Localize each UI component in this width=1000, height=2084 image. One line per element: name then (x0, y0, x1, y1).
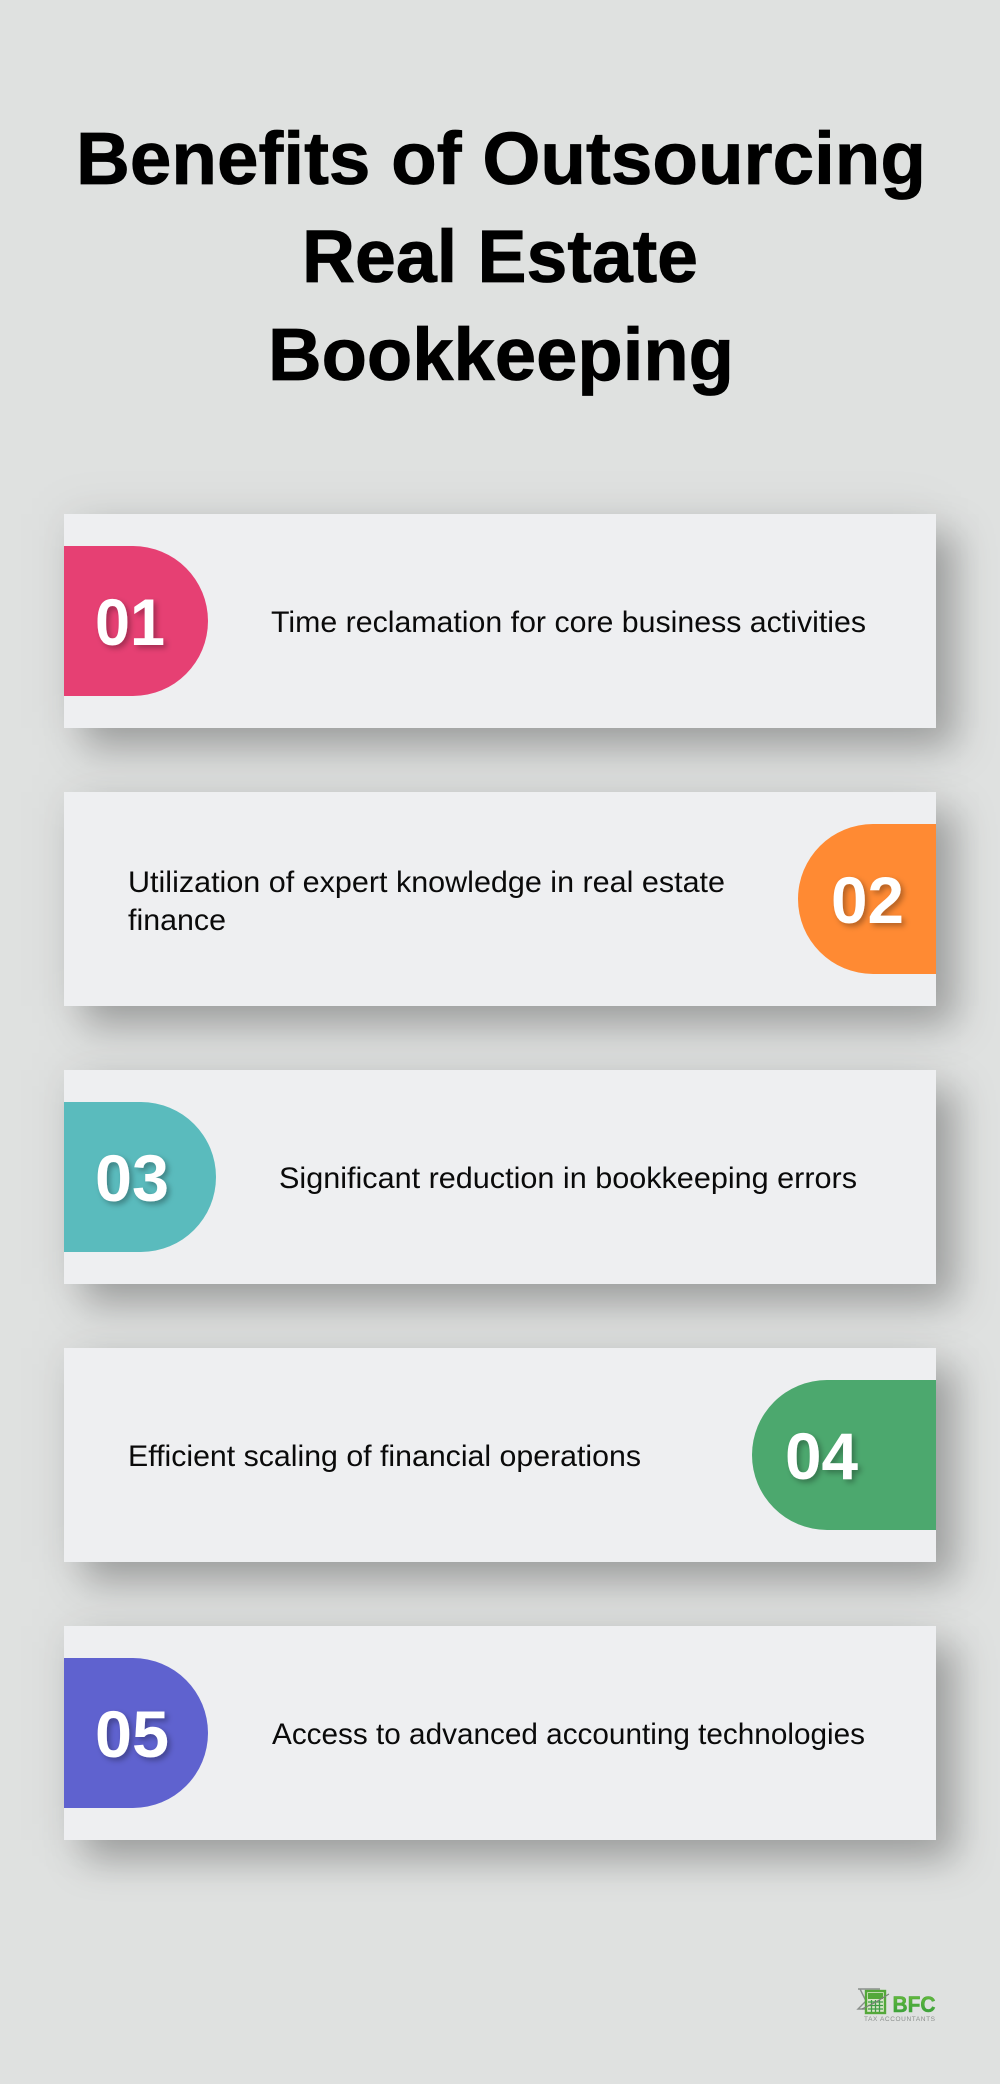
title: Benefits of Outsourcing (76, 117, 926, 200)
badge 03: 03 (95, 1141, 169, 1215)
text 01: Time reclamation for core business activities (271, 606, 866, 639)
title: Real Estate (302, 215, 698, 298)
panel: benefit 03 (64, 1070, 936, 1284)
text 03: Significant reduction in bookkeeping errors (279, 1162, 857, 1195)
badge 01 (64, 546, 208, 696)
text 02: Utilization of expert knowledge in real estate (128, 866, 725, 899)
badge 01: 01 (95, 585, 165, 659)
badge 03 (64, 1102, 216, 1252)
logo wordmark: BFC (892, 1992, 936, 2017)
text 05: Access to advanced accounting technologies (272, 1718, 865, 1751)
title (76, 117, 926, 396)
title: Bookkeeping (268, 313, 734, 396)
badge 04 (752, 1380, 936, 1530)
text 02: finance (128, 904, 226, 937)
icon: calculator (858, 1989, 889, 2013)
badge 02 (798, 824, 936, 974)
logo: BFC Tax Accountants (858, 1989, 936, 2023)
text 02 (128, 866, 725, 937)
panel: benefit 01 (64, 514, 936, 728)
panel: benefit 05 (64, 1626, 936, 1840)
panel: benefit 04 (64, 1348, 936, 1562)
text 04: Efficient scaling of financial operations (128, 1440, 641, 1473)
badge 05: 05 (95, 1697, 169, 1771)
badge 04: 04 (785, 1419, 858, 1493)
panel: benefit 02 (64, 792, 936, 1006)
badge 05 (64, 1658, 208, 1808)
logo tagline: TAX ACCOUNTANTS (864, 2016, 936, 2023)
badge 02: 02 (831, 863, 904, 937)
